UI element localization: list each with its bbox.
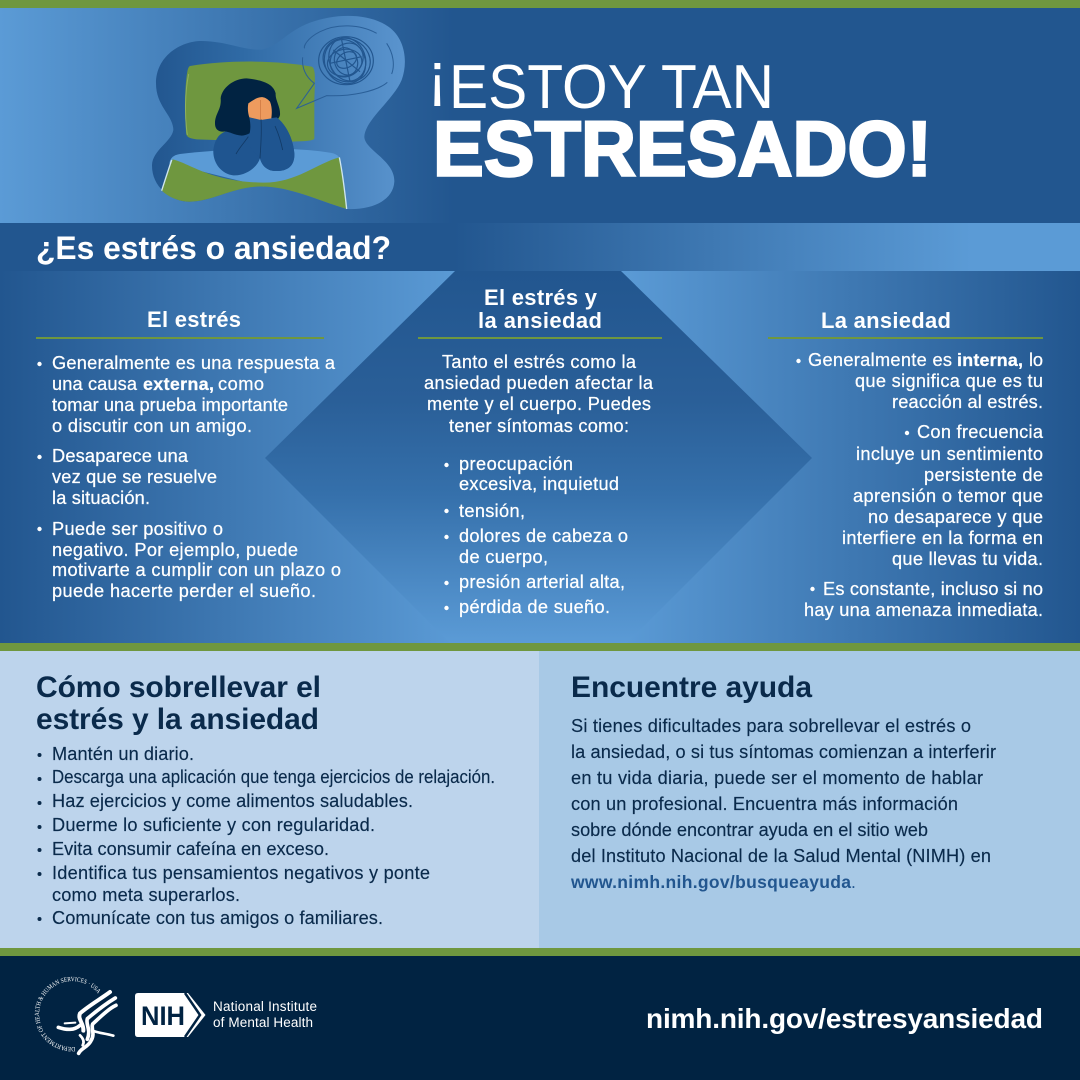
symptom list: [444, 454, 628, 617]
body: [213, 117, 294, 175]
green divider: [0, 643, 1080, 651]
coping list: Descarga una aplicación que tenga ejercicios de relajación.: [52, 767, 495, 787]
symptom list: pérdida de sueño.: [459, 597, 610, 617]
right-aligned bullet text: Es constante, incluso si no: [823, 579, 1043, 599]
bullet list: Puede ser positivo o: [52, 519, 223, 539]
intro text: mente y el cuerpo. Puedes: [427, 394, 651, 414]
paragraph: en tu vida diaria, puede ser el momento de hablar: [571, 768, 983, 788]
bullet list: puede hacerte perder el sueño.: [52, 581, 316, 601]
heading: El estrés y: [484, 285, 598, 310]
hair: [215, 78, 280, 136]
heading: [478, 285, 602, 333]
coping list: Comunícate con tus amigos o familiares.: [52, 908, 383, 928]
symptom list: tensión,: [459, 501, 525, 521]
heading: Encuentre ayuda: [571, 671, 812, 704]
NIH logo: [135, 993, 206, 1037]
heading: [36, 671, 321, 736]
right-aligned bullet text: reacción al estrés.: [892, 392, 1043, 412]
right-aligned bullet text: lo: [1029, 350, 1043, 370]
website url: nimh.nih.gov/estresyansiedad: [646, 1003, 1043, 1034]
paragraph: www.nimh.nih.gov/busqueayuda: [570, 872, 851, 892]
bullet list: Desaparece una: [52, 446, 189, 466]
section band heading: ¿Es estrés o ansiedad?: [36, 230, 391, 266]
bullet list: negativo. Por ejemplo, puede: [52, 540, 298, 560]
heading: la ansiedad: [478, 308, 602, 333]
heading: La ansiedad: [821, 308, 951, 333]
intro text: ansiedad pueden afectar la: [424, 373, 654, 393]
symptom list: de cuerpo,: [459, 547, 548, 567]
intro text: tener síntomas como:: [449, 416, 629, 436]
heading: El estrés: [147, 307, 241, 332]
NIH logo: NIH: [141, 1001, 185, 1031]
NIMH name: of Mental Health: [213, 1015, 313, 1030]
right-aligned bullet text: persistente de: [924, 465, 1043, 485]
right-aligned bullet text: Generalmente es: [808, 350, 952, 370]
title: ¡: [427, 41, 448, 110]
paragraph: la ansiedad, o si tus síntomas comienzan a interferir: [571, 742, 996, 762]
section band heading: [0, 223, 1080, 271]
coping list: Duerme lo suficiente y con regularidad.: [52, 815, 375, 835]
symptom list: excesiva, inquietud: [459, 474, 619, 494]
column: el estrés: [36, 307, 341, 601]
NIMH name: [213, 999, 317, 1030]
column: el estrés y la ansiedad: [418, 285, 662, 617]
symptom list: preocupación: [459, 454, 573, 474]
panel: find help: [539, 651, 1080, 948]
green divider: [0, 948, 1080, 956]
right-aligned bullet text: incluye un sentimiento: [856, 444, 1043, 464]
bullet list: una causa: [52, 374, 138, 394]
coping list: como meta superarlos.: [52, 885, 240, 905]
column: la ansiedad: [768, 308, 1044, 620]
coping list: Haz ejercicios y come alimentos saludables.: [52, 791, 413, 811]
bullet list: [37, 353, 341, 601]
right-aligned bullet text: Con frecuencia: [917, 422, 1044, 442]
title: ESTOY TAN: [449, 53, 774, 122]
bullet list: vez que se resuelve: [52, 467, 217, 487]
blanket green: [162, 157, 347, 209]
bullet list: la situación.: [52, 488, 150, 508]
hands: [248, 97, 272, 120]
title: [427, 41, 932, 192]
pillow: [185, 62, 315, 142]
heading: estrés y la ansiedad: [36, 703, 319, 736]
HHS seal: DEPARTMENT OF HEALTH & HUMAN SERVICES · USA: [34, 976, 100, 1052]
bullet list: Generalmente es una respuesta a: [52, 353, 336, 373]
right-aligned bullet text: que significa que es tu: [855, 371, 1043, 391]
right-aligned bullet text: que llevas tu vida.: [892, 549, 1043, 569]
right-aligned bullet text: interna,: [957, 350, 1023, 370]
blanket light: [169, 149, 341, 187]
comparison background with diamond: [0, 271, 1080, 643]
symptom list: presión arterial alta,: [459, 572, 625, 592]
paragraph: con un profesional. Encuentra más información: [571, 794, 958, 814]
bullet list: motivarte a cumplir con un plazo o: [52, 560, 341, 580]
bullet list: tomar una prueba importante: [52, 395, 288, 415]
right-aligned bullet text: aprensión o temor que: [853, 486, 1043, 506]
bullet list: como: [218, 374, 264, 394]
scribble: [316, 31, 377, 91]
coping list: Identifica tus pensamientos negativos y ponte: [52, 863, 430, 883]
intro text: [424, 352, 654, 436]
right-aligned bullet text: interfiere en la forma en: [842, 528, 1043, 548]
intro text: Tanto el estrés como la: [442, 352, 637, 372]
thought bubble line: [297, 26, 393, 108]
NIMH name: National Institute: [213, 999, 317, 1014]
right-aligned bullet text: hay una amenaza inmediata.: [804, 600, 1043, 620]
paragraph: sobre dónde encontrar ayuda en el sitio web: [571, 820, 928, 840]
symptom list: dolores de cabeza o: [459, 526, 628, 546]
heading: Cómo sobrellevar el: [36, 671, 321, 704]
bullet list: o discutir con un amigo.: [52, 416, 252, 436]
paragraph: del Instituto Nacional de la Salud Mental (NIMH) en: [571, 846, 991, 866]
eagle: [58, 992, 116, 1053]
right-aligned bullet text: no desaparece y que: [868, 507, 1043, 527]
paragraph: .: [851, 872, 856, 892]
title: ESTRESADO!: [433, 104, 932, 192]
illustration: stressed person in bed with thought bubble: [152, 16, 405, 209]
coping list: [38, 744, 495, 928]
bullet list: externa,: [143, 374, 214, 394]
paragraph: [570, 716, 996, 892]
header panel: [0, 0, 1080, 223]
right-aligned bullet text: [796, 350, 1044, 620]
coping list: Mantén un diario.: [52, 744, 194, 764]
paragraph: Si tienes dificultades para sobrellevar el estrés o: [571, 716, 971, 736]
footer: [34, 976, 1043, 1056]
forearms: [245, 117, 294, 171]
coping list: Evita consumir cafeína en exceso.: [52, 839, 329, 859]
panel: coping: [0, 651, 539, 948]
